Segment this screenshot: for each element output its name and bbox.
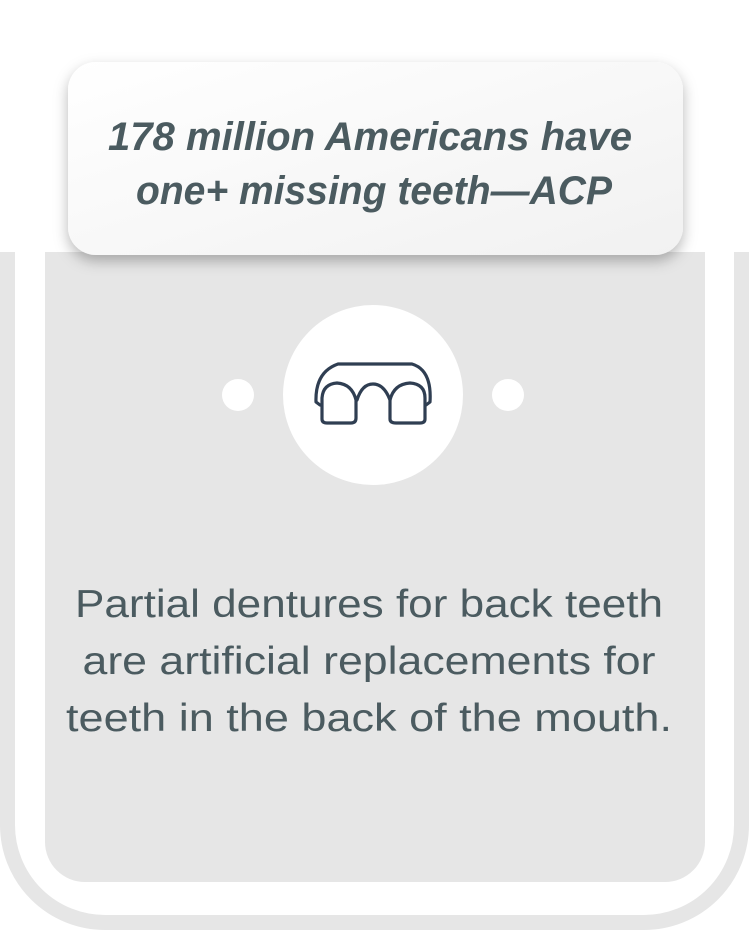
icon: left dot (222, 379, 254, 411)
body text (66, 583, 672, 740)
body text: Partial dentures for back teeth (75, 583, 663, 626)
icon: right dot (492, 379, 524, 411)
header callout (68, 62, 683, 255)
title: 178 million Americans have (108, 115, 632, 159)
body text: are artificial replacements for (82, 640, 656, 683)
icon: teeth in circle (283, 305, 463, 485)
inner panel (45, 252, 705, 882)
title: one+ missing teeth—ACP (136, 169, 612, 213)
body text: teeth in the back of the mouth. (66, 697, 672, 740)
title (108, 115, 632, 213)
outer frame (8, 252, 742, 922)
